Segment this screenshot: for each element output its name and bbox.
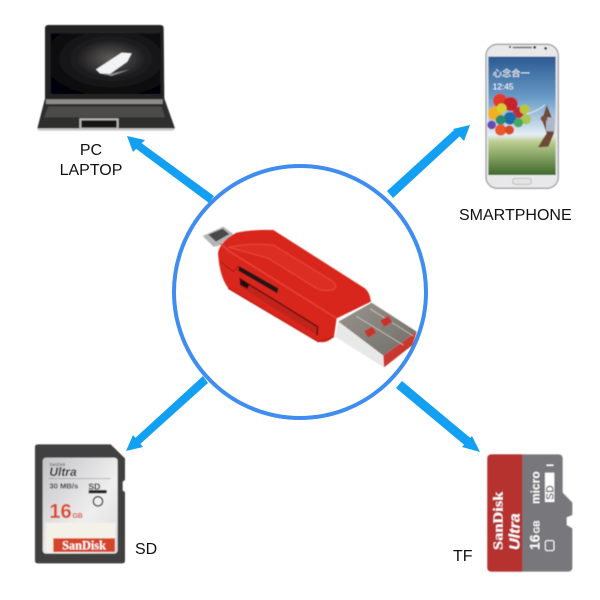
SD slot (239, 278, 318, 335)
icon: TF card: I (545, 464, 556, 467)
TF slot (238, 266, 278, 293)
icon: SD card (35, 444, 125, 563)
icon: SD card: Ultra (49, 465, 77, 479)
icon: smartphone: 12:45 (493, 81, 514, 91)
icon: smartphone (486, 44, 558, 188)
arrow: to SD card (126, 376, 208, 451)
label: PC LAPTOP: LAPTOP (60, 162, 122, 179)
icon: TF card: GB (531, 520, 541, 533)
icon: SD card: 16 (49, 501, 72, 523)
icon: SD card: SanDisk (49, 462, 66, 467)
icon: card reader (203, 227, 417, 367)
icon: SD card: SD (88, 481, 100, 491)
arrow: to laptop (127, 136, 214, 203)
arrow: to TF card (396, 381, 480, 452)
icon: TF card: SD (544, 485, 556, 500)
label: PC LAPTOP: PC (80, 142, 102, 159)
icon: TF card: 16 (527, 534, 543, 550)
icon: TF card: SanDisk (492, 491, 507, 550)
icon: TF card: Ultra (507, 513, 523, 550)
label: PC LAPTOP (60, 142, 122, 179)
USB plug (335, 303, 417, 367)
circle: center ring (174, 166, 426, 418)
label: SD: SD (135, 541, 157, 558)
icon: SD card: 30 MB/s (49, 482, 78, 491)
icon: TF card: micro (528, 471, 542, 504)
arrow: to smartphone (387, 125, 470, 198)
label: TF: TF (453, 548, 473, 565)
icon: smartphone: 心念合一 (493, 68, 530, 79)
icon: SD card: SanDisk (62, 538, 106, 552)
icon: laptop (37, 25, 175, 131)
icon: SD card: GB (72, 513, 83, 520)
label: SMARTPHONE: SMARTPHONE (459, 207, 572, 224)
reader body (218, 230, 371, 342)
icon: TF card (487, 454, 572, 572)
micro USB plug (203, 227, 233, 247)
